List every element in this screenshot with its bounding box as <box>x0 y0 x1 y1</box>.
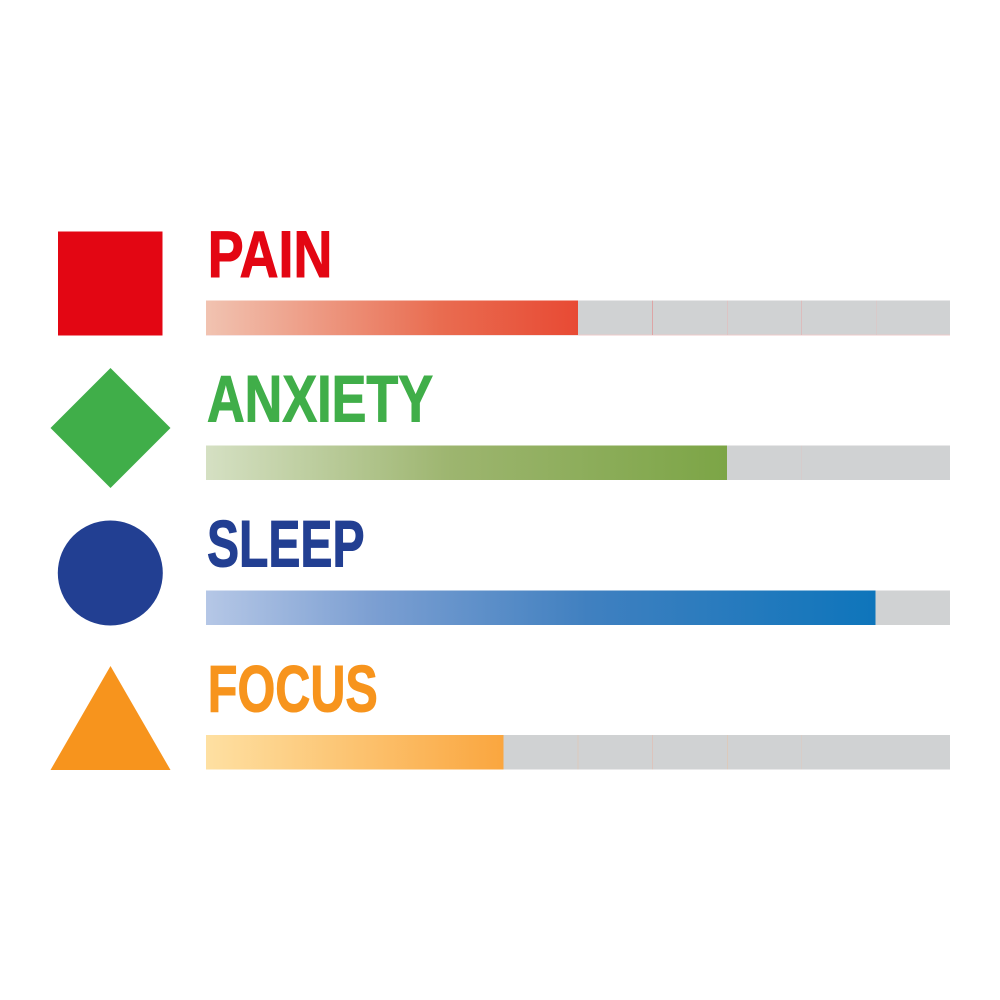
bar: pain <box>206 300 950 336</box>
icon: orange triangle <box>50 666 170 770</box>
bar: anxiety <box>206 446 950 480</box>
row: anxiety <box>50 361 950 488</box>
heading: anxiety: ANXIETY <box>207 361 433 435</box>
bar: sleep <box>206 590 950 625</box>
heading: pain: PAIN <box>208 217 332 291</box>
row: sleep <box>58 507 950 626</box>
bar: focus <box>206 735 950 770</box>
heading: sleep: SLEEP <box>207 507 364 581</box>
icon: blue circle <box>58 520 163 626</box>
row: focus <box>50 651 950 770</box>
heading: focus: FOCUS <box>208 651 378 725</box>
row: pain <box>58 217 950 336</box>
icon: green diamond <box>50 368 170 488</box>
icon: red square <box>58 232 162 336</box>
